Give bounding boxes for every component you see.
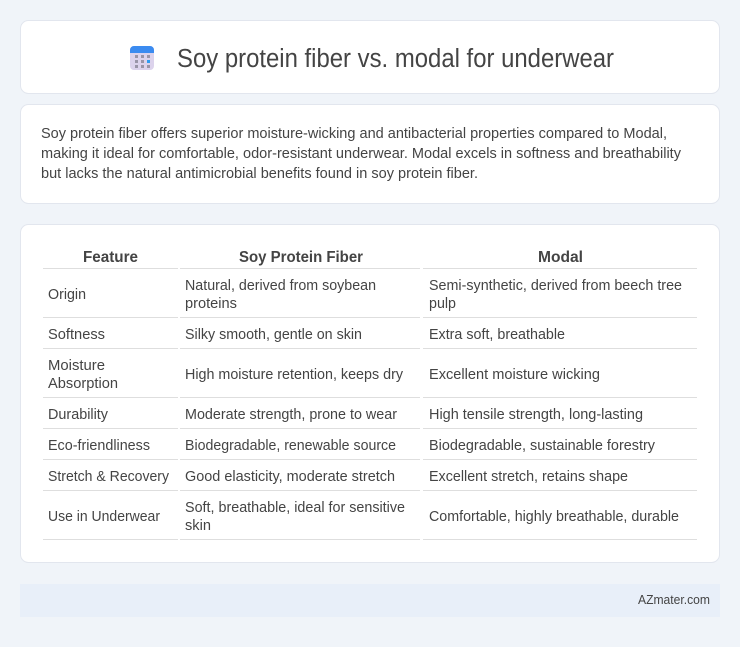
row: softness [48,327,565,343]
row: eco-friendliness [48,438,656,454]
row: stretch and recovery: Excellent stretch, retains shape [429,469,628,485]
row: durability: Durability [48,407,109,423]
panel: comparison table [20,224,720,562]
row: use in underwear [48,500,679,534]
row: use in underwear: skin [185,518,211,534]
description text: Soy protein fiber offers superior moisture-wicking and antibacterial properties compared to Modal, [41,126,667,142]
table header: Soy Protein Fiber [239,249,363,266]
row: moisture absorption [48,358,600,392]
row: eco-friendliness: Biodegradable, sustainable forestry [429,438,656,454]
row: softness: Extra soft, breathable [429,327,565,343]
row: origin: Natural, derived from soybean [185,278,376,294]
description text: but lacks the natural antimicrobial benefits found in soy protein fiber. [41,166,478,182]
row: moisture absorption: Absorption [48,376,118,392]
row: moisture absorption: Moisture [48,358,105,374]
row: origin: pulp [429,296,456,312]
panel: description card [20,104,720,204]
row: moisture absorption: Excellent moisture wicking [429,367,600,383]
icon: calendar [130,46,154,70]
row: softness: Silky smooth, gentle on skin [185,327,362,343]
footer source text: AZmater.com [638,593,710,607]
row: stretch and recovery: Stretch & Recovery [48,469,170,485]
panel: title card [20,20,720,94]
row: durability: Moderate strength, prone to wear [185,407,397,423]
row: eco-friendliness: Biodegradable, renewable source [185,438,396,454]
row: use in underwear: Soft, breathable, ideal for sensitive [185,500,405,516]
row: use in underwear: Comfortable, highly breathable, durable [429,509,679,525]
row: durability: High tensile strength, long-lasting [429,407,643,423]
row: durability [48,407,643,423]
title: Soy protein fiber vs. modal for underwear [177,45,614,73]
row: origin [48,278,682,312]
row: use in underwear: Use in Underwear [48,509,160,525]
row: moisture absorption: High moisture retention, keeps dry [185,367,404,383]
row: origin: Semi-synthetic, derived from beech tree [429,278,682,294]
table header: Modal [538,249,583,266]
description text: making it ideal for comfortable, odor-resistant underwear. Modal excels in softness and breathability [41,146,682,162]
row: origin: Origin [48,287,86,303]
row: eco-friendliness: Eco-friendliness [48,438,150,454]
description text [41,126,682,182]
row: stretch and recovery: Good elasticity, moderate stretch [185,469,395,485]
table header: Feature [83,249,138,266]
table header [83,249,583,266]
row: stretch and recovery [48,469,628,485]
row: origin: proteins [185,296,237,312]
row: softness: Softness [48,327,105,343]
footer bar [20,584,720,617]
